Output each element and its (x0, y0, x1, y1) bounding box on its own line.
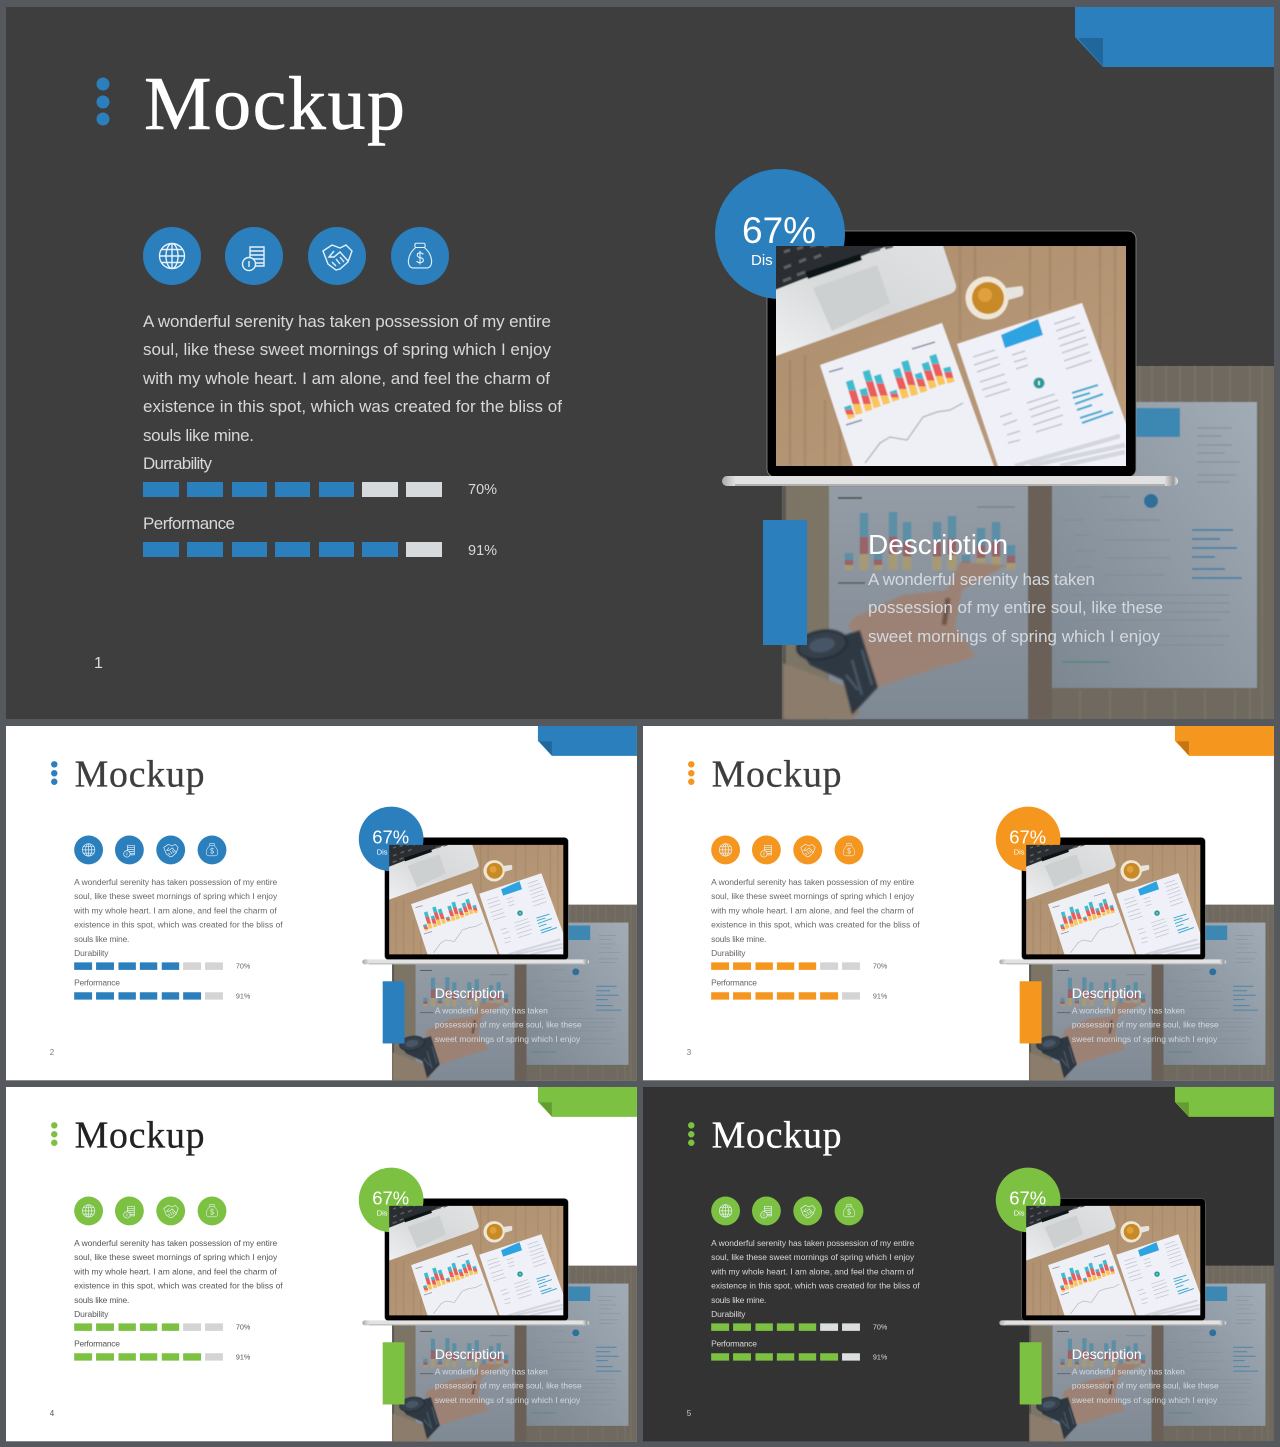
body paragraph (73, 1238, 283, 1305)
meter: durability 70%: 70% (236, 1322, 251, 1331)
accent block (383, 981, 405, 1043)
body paragraph: soul, like these sweet mornings of spring which I enjoy (74, 1252, 278, 1262)
body paragraph: A wonderful serenity has taken possession of my entire (143, 312, 551, 331)
body paragraph: A wonderful serenity has taken possession of my entire (74, 1238, 277, 1248)
icon: handshake (156, 1196, 185, 1225)
meter: performance 91% (711, 1339, 888, 1362)
slide background (643, 1087, 1274, 1441)
meter: performance 91%: Performance (143, 514, 235, 533)
meter: performance 91%: Performance (711, 978, 757, 988)
icon: money bag (198, 1196, 226, 1225)
description: A wonderful serenity has taken (435, 1367, 548, 1377)
title: Mockup (144, 62, 405, 146)
laptop frame (722, 231, 1178, 486)
description: possession of my entire soul, like these (1072, 1020, 1219, 1030)
description: Description (435, 1346, 505, 1362)
description: A wonderful serenity has taken (1072, 1006, 1185, 1016)
description: sweet mornings of spring which I enjoy (1072, 1395, 1218, 1405)
icon: handshake (156, 835, 185, 864)
body paragraph (710, 1238, 920, 1305)
icon: money bag (391, 227, 449, 285)
icon: coins (752, 1196, 781, 1225)
icon: handshake (308, 227, 366, 285)
body paragraph: souls like mine. (711, 934, 766, 944)
description (1072, 1346, 1219, 1405)
meter: performance 91%: Performance (74, 1339, 120, 1349)
description: Description (1072, 985, 1142, 1001)
description: A wonderful serenity has taken (868, 570, 1095, 589)
description (435, 1346, 582, 1405)
stat badge: Dis (1014, 847, 1025, 856)
meter: durability 70% (74, 1309, 251, 1331)
meter: performance 91% (74, 1339, 251, 1362)
body paragraph: soul, like these sweet mornings of spring which I enjoy (143, 340, 552, 359)
icon: globe (74, 1196, 103, 1225)
body paragraph (73, 877, 283, 944)
meter: durability 70%: 70% (873, 1322, 888, 1331)
meter: durability 70%: Durability (74, 948, 109, 958)
laptop screen photo (386, 1203, 566, 1318)
body paragraph: A wonderful serenity has taken possession of my entire (711, 1238, 914, 1248)
body paragraph: existence in this spot, which was created for the bliss of (74, 1281, 283, 1291)
stat badge: 67% (372, 826, 409, 847)
icon: globe (711, 1196, 740, 1225)
meter: performance 91% (711, 978, 888, 1001)
page number: 3 (687, 1048, 692, 1057)
background photo (392, 905, 637, 1080)
meter: durability 70% (74, 948, 251, 970)
laptop screen photo (1023, 842, 1203, 957)
slide background (6, 1087, 637, 1441)
laptop screen photo (386, 842, 566, 957)
description (435, 985, 582, 1044)
description: possession of my entire soul, like these (435, 1381, 582, 1391)
laptop frame (362, 1198, 589, 1325)
stat badge: 67% (1009, 1187, 1046, 1208)
meter: performance 91%: 91% (873, 1353, 888, 1362)
icon: coins (115, 1196, 144, 1225)
slide 2: white blue (6, 726, 637, 1080)
laptop screen photo (1023, 1203, 1203, 1318)
title: Mockup (75, 1115, 205, 1157)
meter: durability 70%: 70% (468, 482, 497, 498)
body paragraph: existence in this spot, which was created for the bliss of (711, 1281, 920, 1291)
slide 3: white orange (643, 726, 1274, 1080)
body paragraph: with my whole heart. I am alone, and feel the charm of (73, 1267, 277, 1277)
meter: durability 70%: 70% (236, 961, 251, 970)
icon row (711, 835, 863, 864)
slide 1: large dark blue (6, 7, 1274, 719)
accent block (763, 520, 807, 645)
icon: coins (752, 835, 781, 864)
title: Mockup (712, 754, 842, 796)
stat badge (715, 169, 845, 299)
title dots (51, 1122, 58, 1146)
description: possession of my entire soul, like these (868, 598, 1163, 617)
meter: performance 91% (74, 978, 251, 1001)
title dots (688, 1122, 695, 1146)
accent block (383, 1342, 405, 1404)
description: Description (868, 529, 1008, 560)
stat badge: Dis (377, 1208, 388, 1217)
body paragraph (142, 312, 562, 445)
title dots (96, 78, 110, 126)
meter: performance 91%: 91% (236, 992, 251, 1001)
icon row (711, 1196, 863, 1225)
meter: durability 70%: Durability (711, 1309, 746, 1319)
body paragraph: with my whole heart. I am alone, and feel the charm of (710, 1267, 914, 1277)
meter: durability 70%: Durability (711, 948, 746, 958)
body paragraph (710, 877, 920, 944)
stat badge: 67% (372, 1187, 409, 1208)
accent block (1020, 981, 1042, 1043)
meter: performance 91%: Performance (74, 978, 120, 988)
corner ribbon (538, 1087, 637, 1117)
stat badge (996, 807, 1060, 871)
meter: performance 91%: 91% (873, 992, 888, 1001)
body paragraph: soul, like these sweet mornings of spring which I enjoy (711, 1252, 915, 1262)
meter: durability 70%: Durrability (143, 454, 212, 473)
icon: handshake (793, 1196, 822, 1225)
slide background (6, 726, 637, 1080)
meter: durability 70% (711, 1309, 888, 1331)
stat badge: Dis (377, 847, 388, 856)
corner ribbon (1075, 7, 1274, 67)
stat badge: Dis (1014, 1208, 1025, 1217)
laptop frame (999, 837, 1226, 964)
icon row (143, 227, 449, 285)
meter: performance 91% (143, 514, 497, 559)
stat badge (359, 1168, 423, 1232)
corner ribbon (1175, 1087, 1274, 1117)
body paragraph: with my whole heart. I am alone, and feel the charm of (73, 906, 277, 916)
background photo (1029, 905, 1274, 1080)
icon: globe (143, 227, 201, 285)
slide 4: white green (6, 1087, 637, 1441)
body paragraph: souls like mine. (143, 426, 254, 445)
meter: performance 91%: Performance (711, 1339, 757, 1349)
meter: durability 70%: Durability (74, 1309, 109, 1319)
body paragraph: existence in this spot, which was created for the bliss of (711, 920, 920, 930)
body paragraph: soul, like these sweet mornings of spring which I enjoy (74, 891, 278, 901)
body paragraph: with my whole heart. I am alone, and feel the charm of (710, 906, 914, 916)
background photo (392, 1266, 637, 1441)
laptop frame (999, 1198, 1226, 1325)
background photo (782, 366, 1274, 719)
corner ribbon (1175, 726, 1274, 756)
description (868, 529, 1163, 646)
body paragraph: souls like mine. (74, 934, 129, 944)
description: possession of my entire soul, like these (435, 1020, 582, 1030)
page number: 5 (687, 1409, 692, 1418)
stat badge: Dis (751, 252, 773, 269)
icon: globe (74, 835, 103, 864)
title: Mockup (75, 754, 205, 796)
description (1072, 985, 1219, 1044)
meter: durability 70% (143, 454, 497, 498)
stat badge (996, 1168, 1060, 1232)
description: possession of my entire soul, like these (1072, 1381, 1219, 1391)
body paragraph: souls like mine. (74, 1295, 129, 1305)
background photo (1029, 1266, 1274, 1441)
body paragraph: A wonderful serenity has taken possession of my entire (711, 877, 914, 887)
icon row (74, 1196, 226, 1225)
body paragraph: existence in this spot, which was created for the bliss of (143, 397, 562, 416)
description: Description (435, 985, 505, 1001)
page number: 2 (50, 1048, 55, 1057)
description: sweet mornings of spring which I enjoy (435, 1395, 581, 1405)
meter: durability 70% (711, 948, 888, 970)
icon: coins (225, 227, 283, 285)
title: Mockup (712, 1115, 842, 1157)
title dots (51, 761, 58, 785)
description: sweet mornings of spring which I enjoy (435, 1034, 581, 1044)
page number: 1 (94, 655, 103, 672)
description: sweet mornings of spring which I enjoy (1072, 1034, 1218, 1044)
body paragraph: soul, like these sweet mornings of spring which I enjoy (711, 891, 915, 901)
description: A wonderful serenity has taken (1072, 1367, 1185, 1377)
icon: coins (115, 835, 144, 864)
icon: globe (711, 835, 740, 864)
icon row (74, 835, 226, 864)
slide 5: dark green (643, 1087, 1274, 1441)
slide background (6, 7, 1274, 719)
description: Description (1072, 1346, 1142, 1362)
title dots (688, 761, 695, 785)
laptop frame (362, 837, 589, 964)
description: A wonderful serenity has taken (435, 1006, 548, 1016)
slide background (643, 726, 1274, 1080)
stat badge: 67% (1009, 826, 1046, 847)
stat badge: 67% (742, 210, 816, 251)
corner ribbon (538, 726, 637, 756)
icon: money bag (835, 835, 863, 864)
icon: money bag (198, 835, 226, 864)
laptop screen photo (770, 240, 1132, 472)
stat badge (359, 807, 423, 871)
body paragraph: souls like mine. (711, 1295, 766, 1305)
meter: performance 91%: 91% (236, 1353, 251, 1362)
body paragraph: existence in this spot, which was created for the bliss of (74, 920, 283, 930)
body paragraph: with my whole heart. I am alone, and feel the charm of (142, 369, 550, 388)
meter: performance 91%: 91% (468, 543, 497, 559)
icon: money bag (835, 1196, 863, 1225)
page number: 4 (50, 1409, 55, 1418)
accent block (1020, 1342, 1042, 1404)
description: sweet mornings of spring which I enjoy (868, 627, 1160, 646)
icon: handshake (793, 835, 822, 864)
meter: durability 70%: 70% (873, 961, 888, 970)
body paragraph: A wonderful serenity has taken possession of my entire (74, 877, 277, 887)
